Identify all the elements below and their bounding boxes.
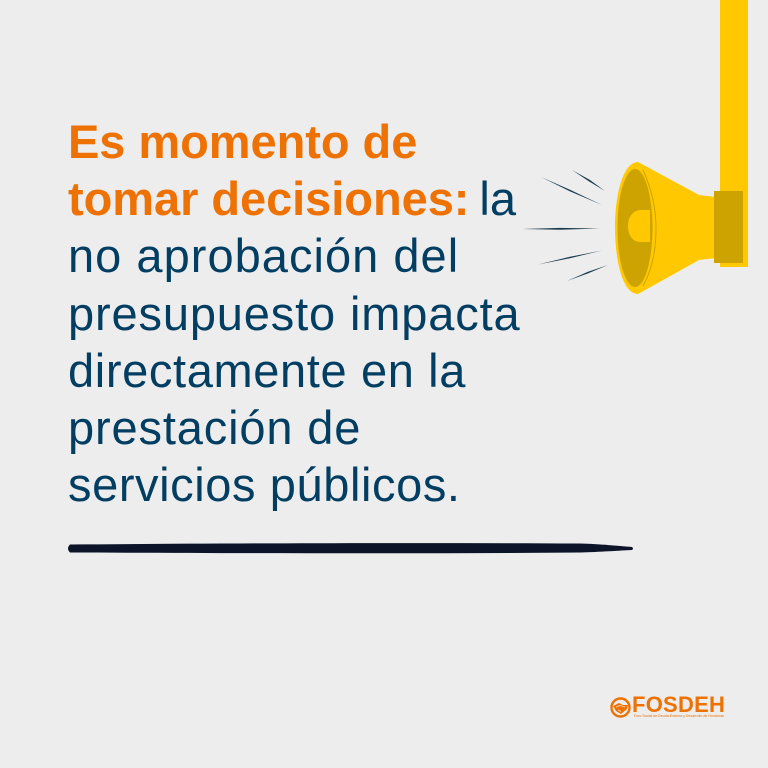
logo emblem [610,697,631,718]
headline text [68,115,520,511]
headline text: Es momento de [68,115,417,168]
headline text: directamente en la [68,344,466,397]
headline text: prestación de [68,401,361,454]
headline text: servicios públicos. [68,458,461,511]
horn rim line [643,170,656,286]
speaker cap [628,210,650,242]
logo: FOSDEH [610,692,725,718]
headline text: tomar decisiones: la [68,172,516,225]
horn opening [618,169,652,287]
mounting bracket [714,191,743,263]
pole [720,0,748,267]
logo name: FOSDEH [632,692,725,717]
headline text: presupuesto impacta [68,287,520,340]
logo subtitle: Foro Social de Deuda Externa y Desarrollo de Honduras [634,714,724,718]
megaphone horn [615,162,716,294]
headline text: no aprobación del [68,229,459,282]
